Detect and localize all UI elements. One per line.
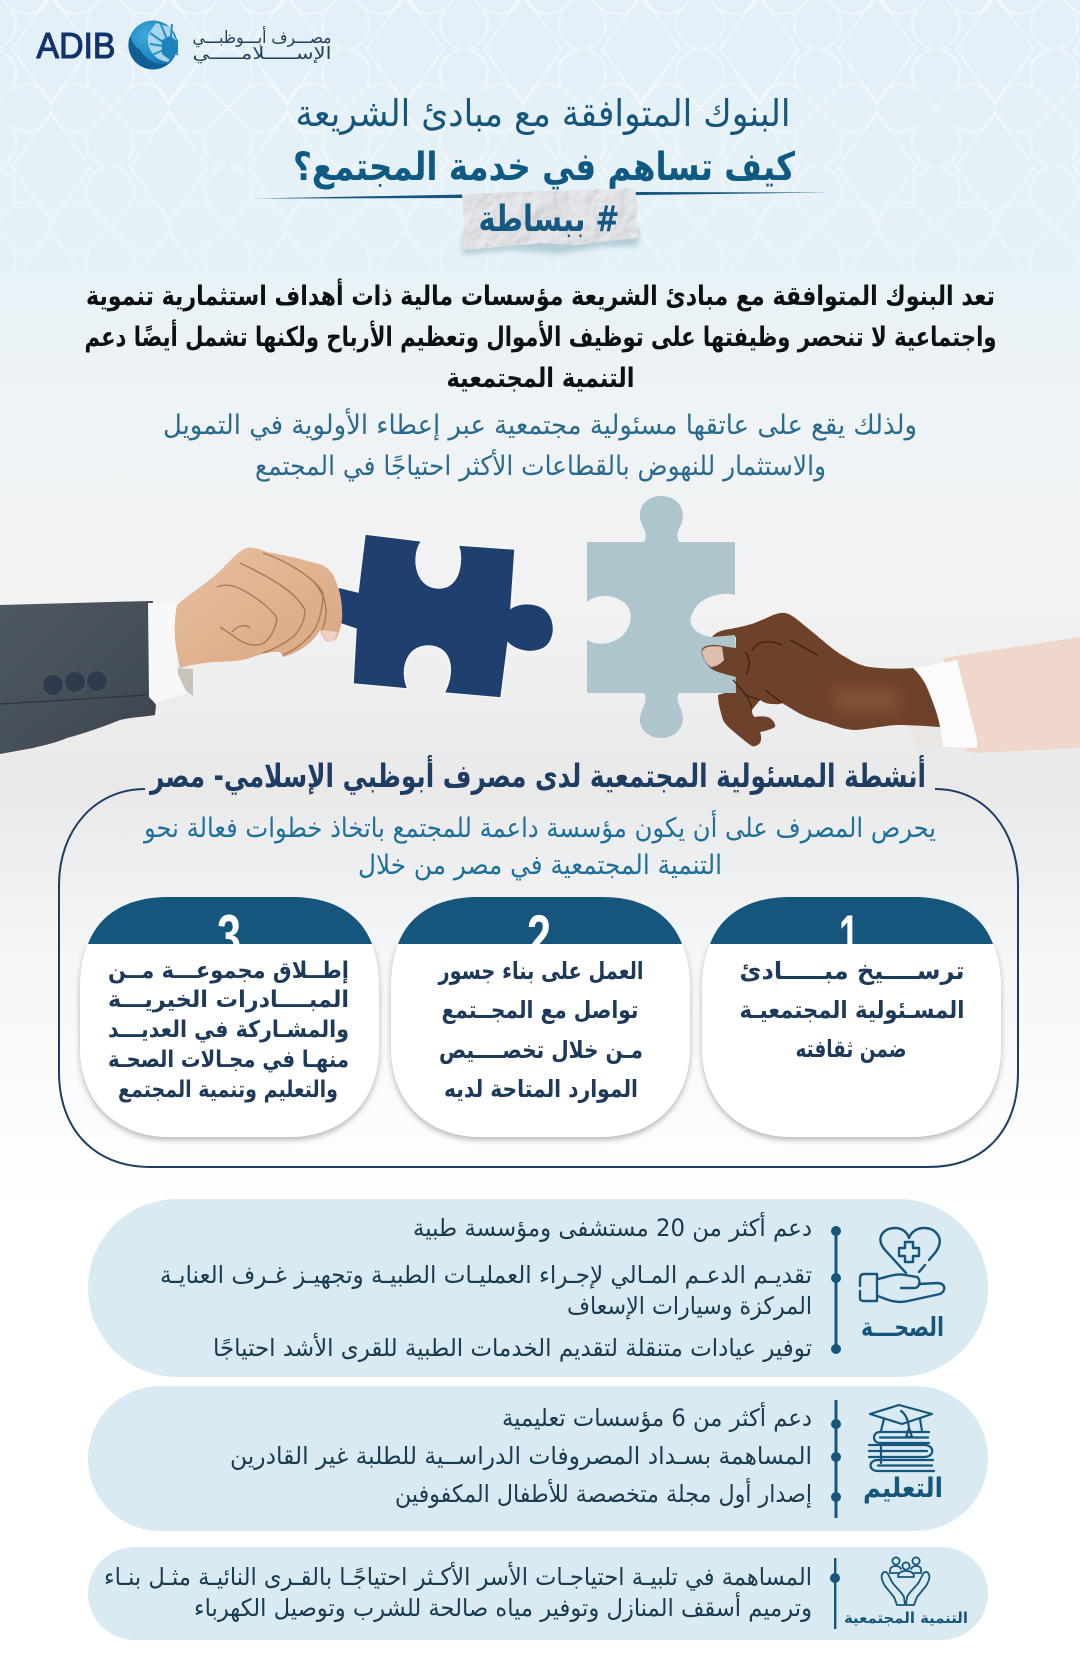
logo Arabic name [192,26,332,64]
card 2: مـن خلال تخصــــيص [439,1036,643,1064]
health text: المركزة وسيارات الإسعاف [567,1292,812,1320]
intro highlight: والاستثمار للنهوض بالقطاعات الأكثر احتياجًا في المجتمع [255,448,826,482]
health text: توفير عيادات متنقلة لتقديم الخدمات الطبية للقرى الأشد احتياجًا [213,1333,812,1362]
panel intro text: التنمية المجتمعية في مصر من خلال [358,850,722,881]
cuff: right [907,660,977,757]
card 1: المسـئولية المجتمعيـة [740,996,964,1024]
panel: activities [59,789,1018,1167]
icon: people in hands [882,1557,929,1605]
community timeline [830,1558,840,1629]
panel intro text: يحرص المصرف على أن يكون مؤسسة داعمة للمجتمع باتخاذ خطوات فعالة نحو [142,809,936,844]
icon: graduation cap and books [869,1405,934,1471]
education text: دعم أكثر من 6 مؤسسات تعليمية [502,1402,812,1432]
health text: دعم أكثر من 20 مستشفى ومؤسسة طبية [413,1212,812,1242]
card 3: المبــــادرات الخيريـــة [108,987,349,1013]
panel: community development [88,1547,988,1640]
card 3: منهـا في مجـالات الصحـة [108,1047,349,1073]
community text: وترميم أسقف المنازل وتوفير مياه صالحة للشرب وتوصيل الكهرباء [194,1592,812,1622]
logo Arabic name: الإســـــلامـــــي [192,44,332,64]
hand: left [175,548,342,668]
card 2: تواصل مع المجــتمع [442,996,638,1024]
card 2: الموارد المتاحة لديه [444,1075,638,1103]
logo wordmark: ADIB [36,25,116,66]
icon: heart in hand [860,1228,944,1302]
community text [104,1562,812,1622]
card 3 [80,897,379,1137]
education label: التعليم [863,1473,943,1504]
card 2: 2 [527,903,551,970]
education timeline [831,1400,841,1518]
sleeve: right [943,637,1080,753]
health timeline [831,1226,841,1354]
title rule [251,192,830,198]
card 1 [702,897,1001,1137]
community label: التنمية المجتمعية [844,1609,968,1627]
card 1: ترســــيخ مبـــــادئ [740,957,964,985]
card 3: 3 [217,903,241,970]
panel: health [88,1199,988,1377]
panel intro text [142,809,936,881]
card 3: إطــلاق مجموعـــة مــن [108,958,349,984]
health text [160,1212,812,1362]
tag: torn paper [462,188,640,255]
community text: المساهمة في تلبيـة احتياجـات الأسر الأكـثر احتياجًـا بالقـرى النائيـة مثـل بنـاء [104,1562,812,1591]
panel: education [88,1386,988,1531]
health text: تقديـم الدعـم المـالي لإجـراء العمليـات الطبيـة وتجهيـز غـرف العنايـة [160,1261,812,1289]
education text [230,1402,812,1509]
intro paragraph: التنمية المجتمعية [446,363,634,394]
card 3: والمشـاركة في العديـــد [108,1017,349,1043]
logo: ADIB [36,20,332,70]
card 2: العمل على بناء جسور [438,957,644,985]
health label: الصحـــة [861,1313,944,1343]
title line 1: البنوك المتوافقة مع مبادئ الشريعة [296,92,790,135]
illustration: hands joining puzzle pieces [0,496,1080,757]
intro paragraph [84,278,996,394]
hand: right, palm behind piece [712,613,940,746]
logo Arabic name: مصـــرف أبـــوظبـــي [192,26,332,48]
education text: إصدار أول مجلة متخصصة للأطفال المكفوفين [395,1478,812,1509]
sleeve: left jacket [0,601,156,754]
education text: المساهمة بسـداد المصروفات الدراســية للطلبة غير القادرين [230,1442,812,1470]
card 1: ضمن ثقافته [796,1035,906,1063]
hand: right thumb [702,640,900,712]
title line 2: كيف تساهم في خدمة المجتمع؟ [293,145,795,190]
card 3: والتعليم وتنمية المجتمع [118,1077,338,1103]
intro highlight [163,407,917,482]
tag text: # ببساطة [478,199,620,240]
logo globe [128,20,178,70]
card 2 [391,897,690,1137]
puzzle piece: light [587,496,736,738]
card 1: 1 [839,903,859,970]
cuff: left [148,603,193,703]
intro highlight: ولذلك يقع على عاتقها مسئولية مجتمعية عبر إعطاء الأولوية في التمويل [163,407,917,441]
puzzle piece: dark [338,534,554,698]
